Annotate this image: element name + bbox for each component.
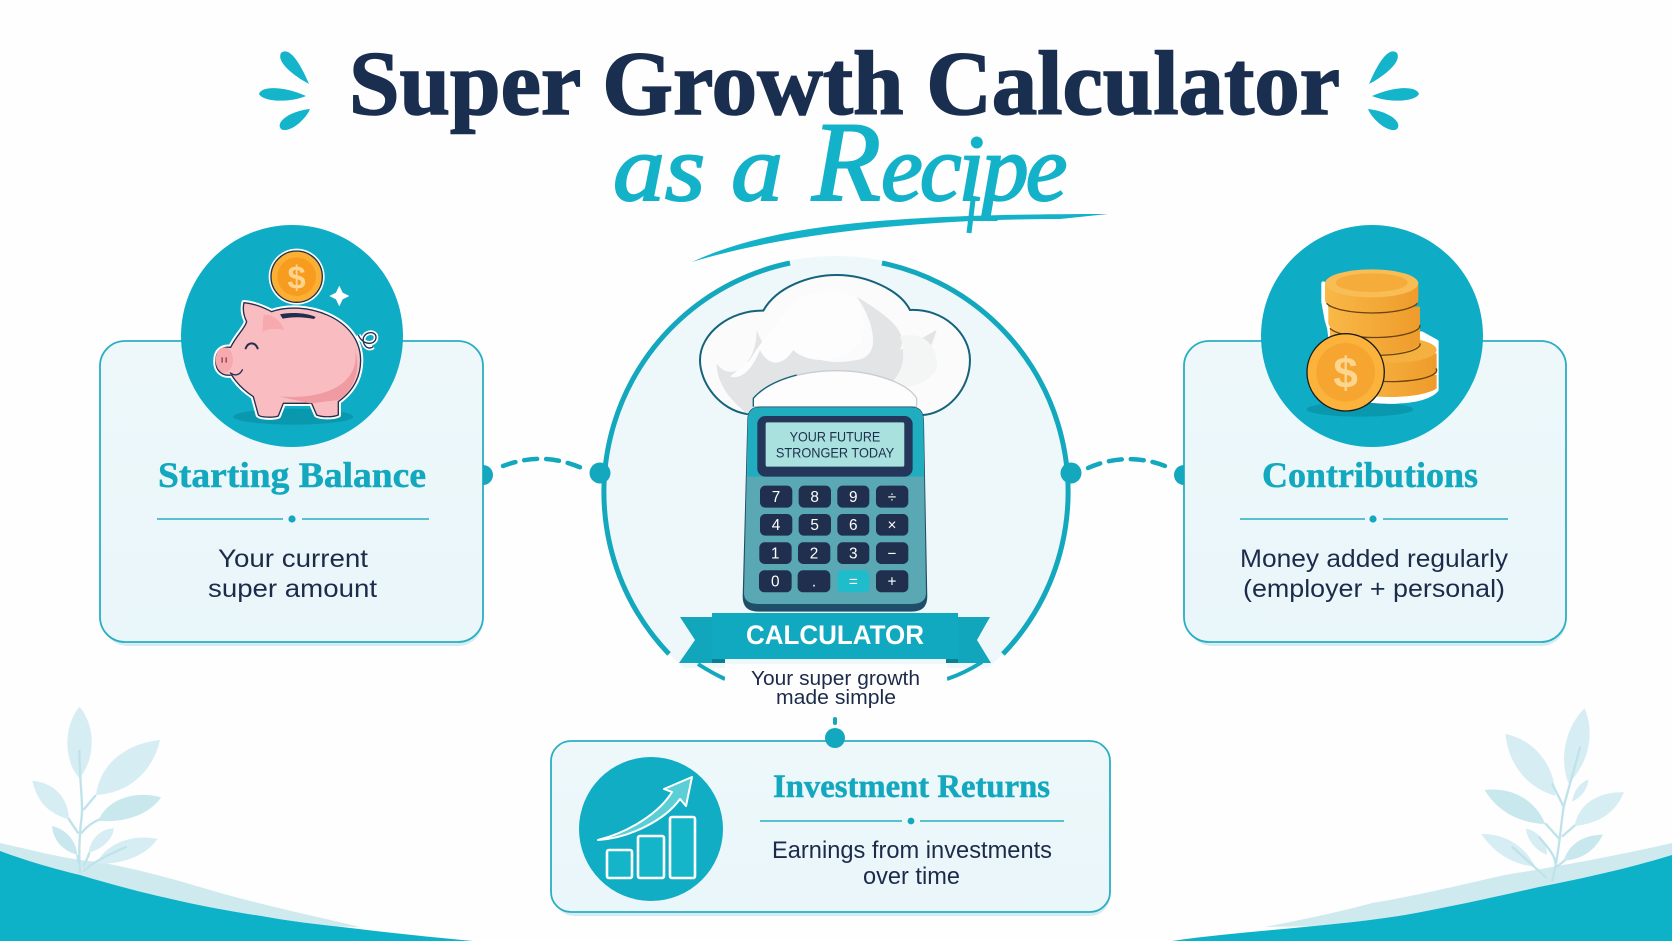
icon: left leaf sprig	[32, 707, 161, 873]
title: Super Growth Calculator: Super Growth Calculator	[349, 33, 1340, 134]
text: earnings from investments	[772, 837, 1052, 890]
calculator display text	[776, 429, 895, 460]
bottom wave	[0, 843, 1672, 941]
calculator keypad: ×	[887, 517, 896, 534]
calculator keypad: 4	[772, 517, 781, 534]
heading: Investment Returns: Investment Returns	[773, 769, 1050, 805]
calculator keypad: =	[849, 573, 858, 590]
calculator keypad: +	[887, 573, 896, 590]
icon: left title splash	[259, 51, 310, 130]
coins icon circle	[1261, 225, 1483, 447]
text: your super growth made simple	[751, 668, 920, 709]
text: your current super amount: Your current	[218, 545, 368, 573]
icon: stack of coins: $	[1333, 349, 1358, 398]
icon: right leaf sprig	[1481, 708, 1624, 882]
calculator keypad	[759, 486, 908, 592]
banner: CALCULATOR	[679, 613, 991, 663]
text: money added regularly: (employer + personal)	[1243, 575, 1505, 603]
white area under banner	[725, 664, 947, 726]
text: earnings from investments: over time	[863, 863, 960, 890]
icon: right title splash	[1368, 51, 1419, 130]
icon: chef hat	[700, 275, 970, 415]
icon: piggy bank with coin	[216, 249, 376, 425]
calculator keypad: −	[887, 545, 896, 562]
calculator keypad: 7	[772, 489, 780, 506]
subtitle: as a Recipe: as a	[613, 117, 783, 221]
subtitle: as a Recipe: Recipe	[811, 100, 1066, 225]
panel: central calculator circle	[590, 256, 1082, 726]
calculator keypad: 6	[849, 517, 858, 534]
calculator keypad: 5	[810, 517, 819, 534]
calculator keypad: .	[812, 573, 816, 590]
calculator display text: YOUR FUTURE	[790, 429, 880, 445]
calculator keypad: 2	[810, 545, 818, 562]
subtitle: as a Recipe	[613, 100, 1066, 233]
calculator keypad: 0	[771, 573, 780, 590]
calculator keypad: 8	[810, 489, 819, 506]
icon: stack of coins	[1307, 269, 1437, 417]
calculator keypad: 1	[771, 545, 780, 562]
banner: CALCULATOR: CALCULATOR	[746, 620, 924, 650]
panel: starting balance	[100, 225, 483, 646]
connector bead to calculator	[825, 717, 845, 748]
connector arrow: left panel to calculator	[483, 459, 584, 485]
panel: contributions	[1184, 225, 1566, 646]
calculator keypad: ÷	[888, 489, 896, 506]
text: your super growth made simple: Your super growth	[751, 668, 920, 690]
text: money added regularly	[1240, 545, 1509, 603]
connector arrow: right panel to calculator	[1088, 459, 1184, 485]
calculator keypad: 9	[849, 489, 858, 506]
piggy icon circle	[181, 225, 403, 447]
text: your current super amount: super amount	[208, 575, 377, 603]
heading: Starting Balance: Starting Balance	[158, 455, 426, 495]
icon: piggy bank with coin: $	[288, 258, 306, 295]
text: earnings from investments: Earnings from investments	[772, 837, 1052, 864]
calculator keypad: 3	[849, 545, 858, 562]
heading: Contributions: Contributions	[1262, 455, 1478, 495]
text: money added regularly: Money added regularly	[1240, 545, 1509, 573]
calculator	[743, 407, 927, 612]
text: your super growth made simple: made simple	[776, 687, 896, 709]
calculator display text: STRONGER TODAY	[776, 444, 895, 460]
swoosh under subtitle	[692, 214, 1108, 262]
text: your current super amount	[208, 545, 377, 603]
panel: investment returns	[551, 717, 1110, 916]
icon: growth chart circle	[579, 757, 723, 901]
